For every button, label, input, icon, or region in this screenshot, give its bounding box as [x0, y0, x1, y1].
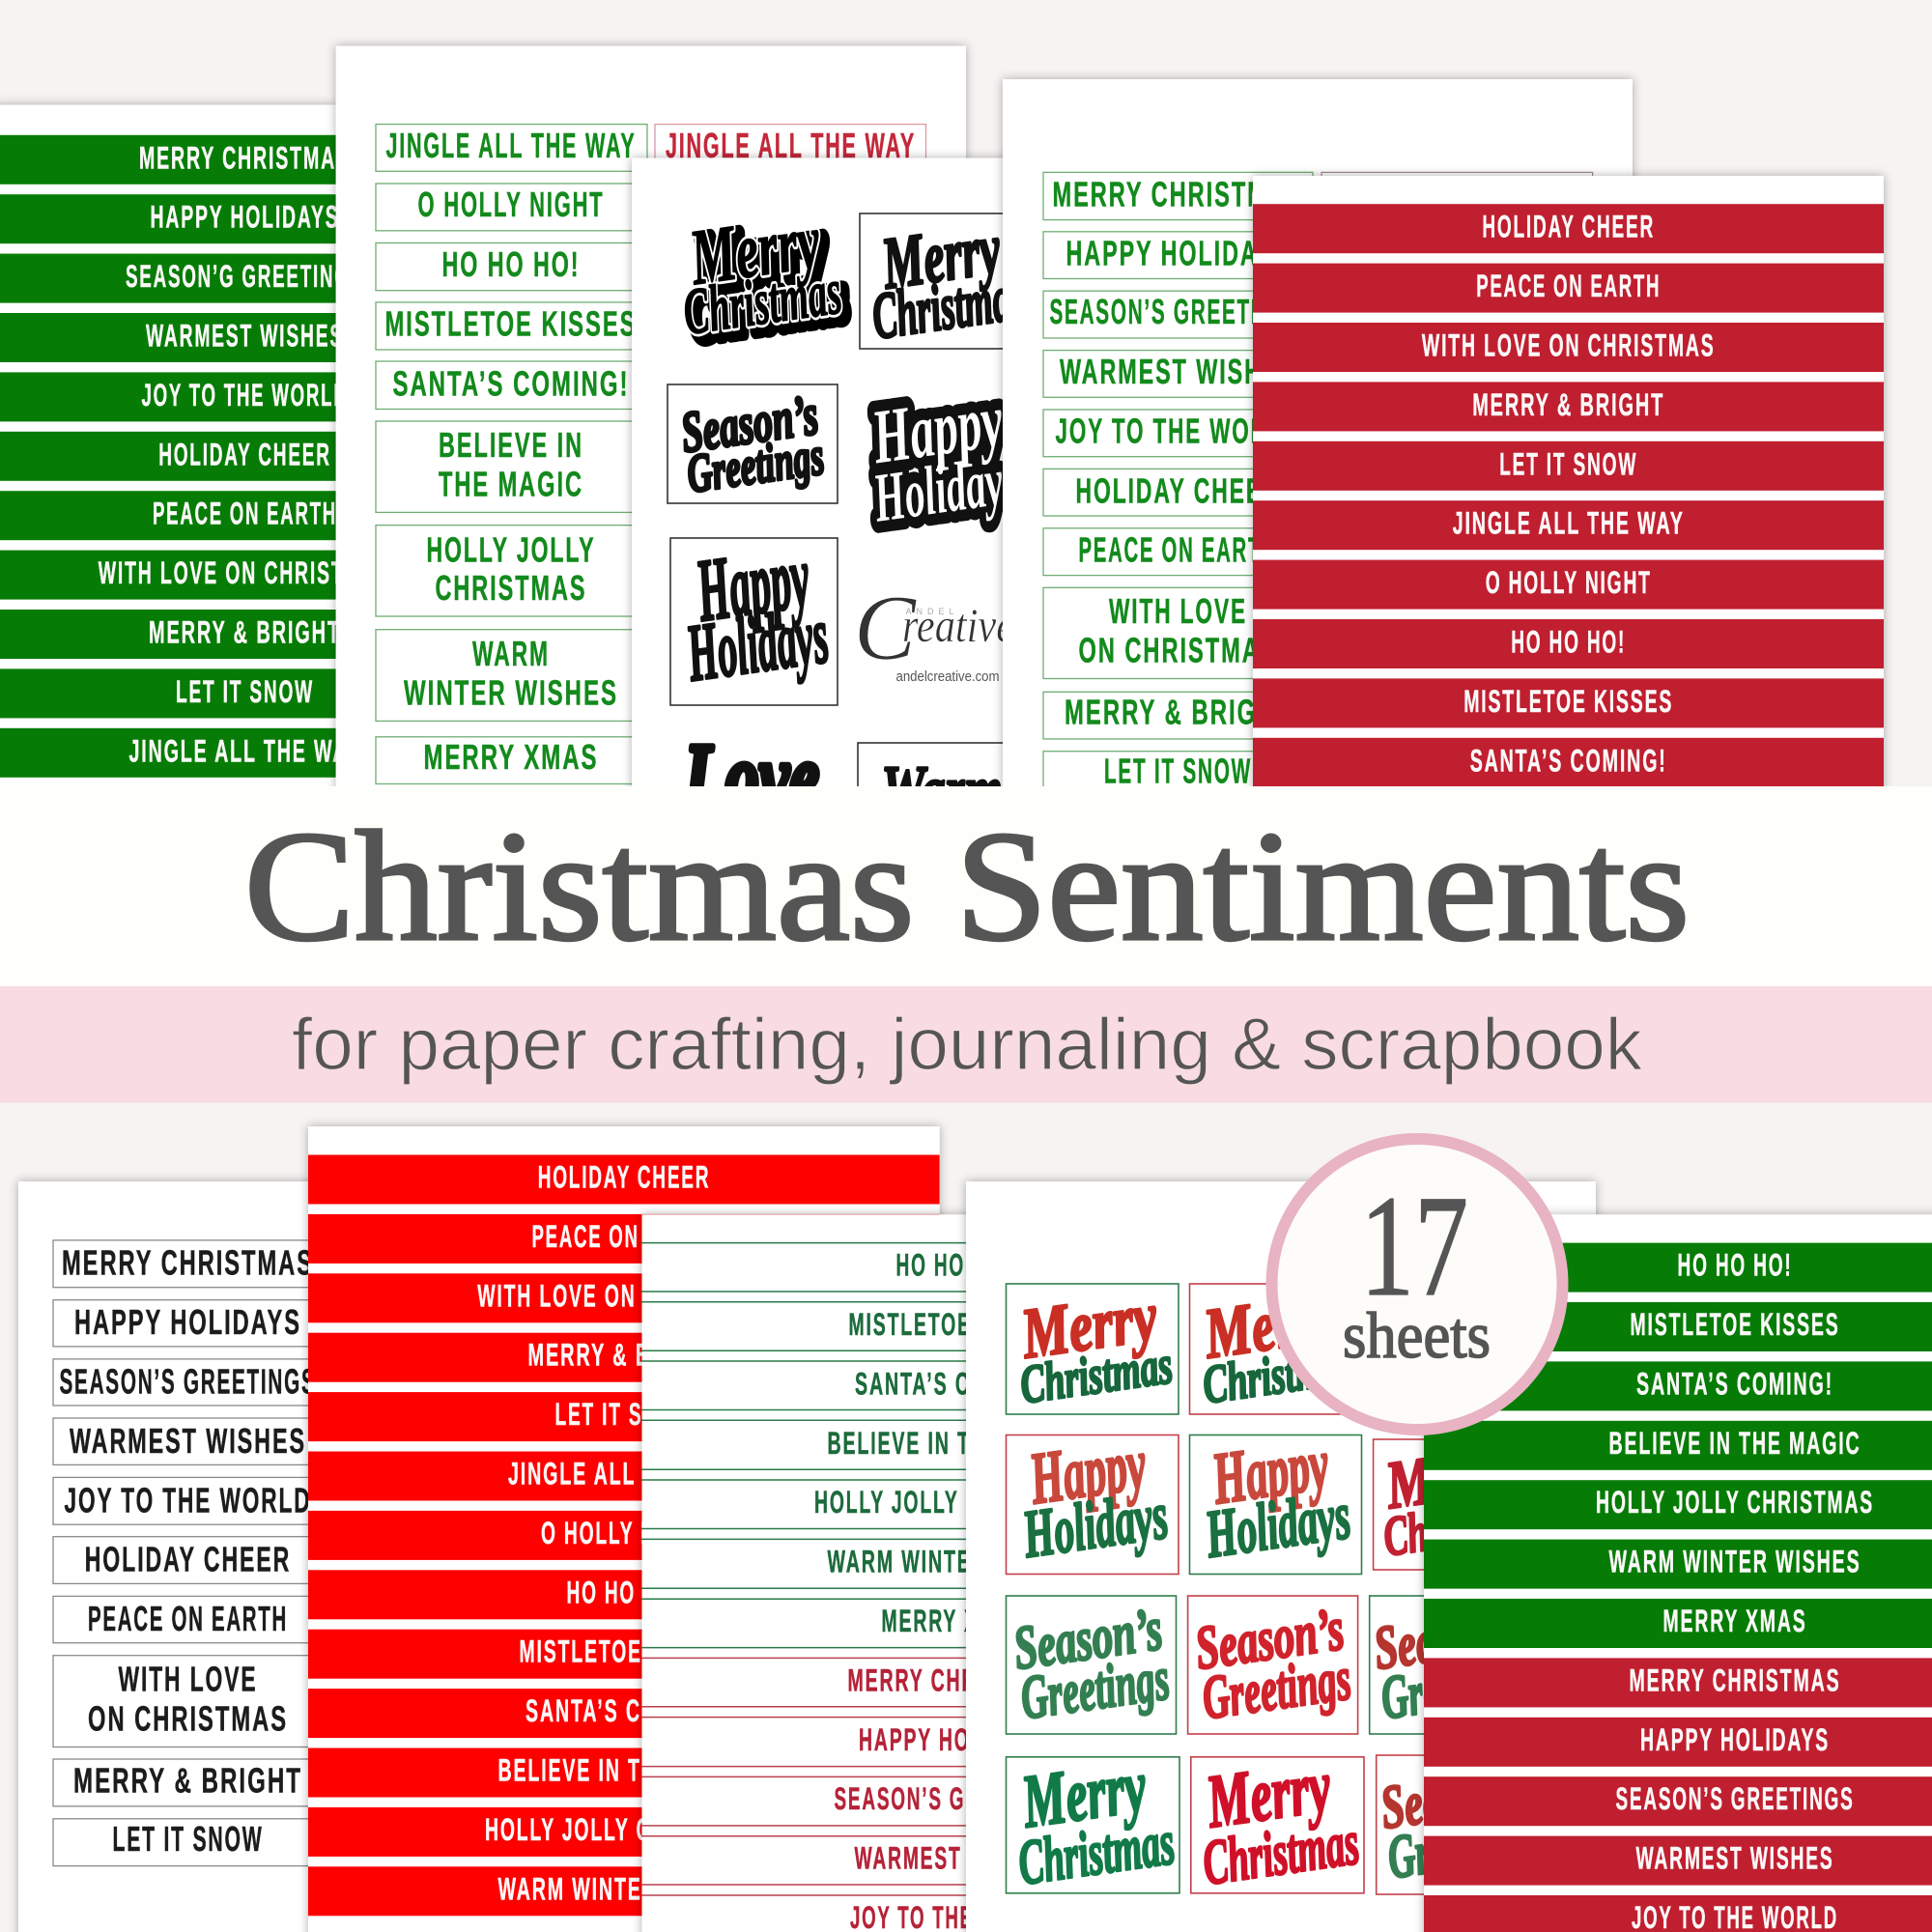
- strip: peace on earth: [0, 491, 337, 540]
- strip: joy to the world: [1424, 1895, 1932, 1932]
- sticker: happy holidays black blob: [860, 377, 1023, 537]
- strip: warmest wishes: [1424, 1836, 1932, 1886]
- label: happy holidays: HAPPY HOLIDAYS: [1066, 233, 1291, 272]
- label: jingle all the way red: [655, 125, 925, 171]
- label: holly jolly christmas: CHRISTMAS: [435, 568, 587, 608]
- strip: santas coming: [1253, 738, 1884, 787]
- strip: warm winter wishes: WARM WINTER WISHES: [498, 1871, 750, 1906]
- strip: believe in the magic: [308, 1748, 940, 1797]
- sticker: seasons greetings bottom: Greetings: [1383, 1803, 1541, 1891]
- sticker: happy holidays framed: [670, 526, 838, 705]
- strip: merry and bright: [0, 610, 341, 659]
- label: empty second column: [1321, 172, 1593, 220]
- strip: warm winter wishes: [1424, 1540, 1932, 1589]
- label: let it snow: [1043, 752, 1313, 798]
- sticker: happy holidays black blob: Holidays: [868, 440, 1023, 537]
- panel: black lettering stickers sheet: [632, 158, 1030, 831]
- text: mistletoe kisses: MISTLETOE KISSES: [848, 1307, 1059, 1342]
- strip: santas coming: [308, 1689, 940, 1738]
- sticker: merry christmas red green second: Christmas: [1199, 1335, 1358, 1415]
- sticker: seasons greetings green: [1007, 1594, 1177, 1734]
- sticker: happy holidays framed: Happy: [690, 526, 815, 639]
- strip: holiday cheer: [1253, 204, 1884, 253]
- label: jingle all the way red: JINGLE ALL THE WAY: [666, 126, 916, 165]
- sticker: happy holidays red green: [1007, 1421, 1179, 1575]
- label: merry christmas: MERRY CHRISTMAS: [1053, 174, 1304, 213]
- panel: thin ruled labels sheet: [641, 1214, 1093, 1932]
- strip: peace on earth: PEACE ON EARTH: [531, 1219, 717, 1254]
- label: ho ho ho: HO HO HO!: [442, 244, 580, 284]
- title banner: [0, 786, 1932, 986]
- strip: mistletoe kisses: MISTLETOE KISSES: [1463, 684, 1673, 719]
- label: let it snow: LET IT SNOW: [112, 1819, 263, 1859]
- strip: ho ho ho: [1253, 619, 1884, 668]
- strip: ho ho ho: HO HO HO!: [566, 1575, 682, 1609]
- label: merry and bright: [53, 1759, 328, 1806]
- sticker: happy holidays black blob: Happy: [867, 378, 1009, 480]
- label: joy to the world: [53, 1477, 328, 1524]
- label: merry and bright: MERRY & BRIGHT: [73, 1760, 302, 1801]
- logo: andel creative: C: [854, 576, 917, 679]
- strip: holiday cheer: HOLIDAY CHEER: [1482, 210, 1655, 244]
- logo: andel creative: reative: [902, 598, 1014, 652]
- text: warm winter wishes: WARM WINTER WISHES: [827, 1545, 1080, 1579]
- strip: mistletoe kisses: MISTLETOE KISSES: [520, 1634, 728, 1669]
- label: holiday cheer: HOLIDAY CHEER: [85, 1540, 291, 1579]
- strip: o holly night: [308, 1511, 940, 1560]
- logo: andel creative: andelcreative.com: [896, 669, 999, 685]
- sticker: merry christmas red green: [1007, 1276, 1179, 1415]
- sticker: merry christmas red: Merry: [1201, 1743, 1336, 1844]
- sticker: merry christmas red green second: Merry: [1199, 1277, 1346, 1375]
- label: merry and bright: MERRY & BRIGHT: [1065, 693, 1292, 732]
- sticker: merry christmas green: Merry: [1016, 1743, 1151, 1844]
- strip: seasons greetings: [0, 254, 364, 303]
- strip: santas coming: SANTA’S COMING!: [1470, 743, 1667, 778]
- strip: holly jolly christmas: [308, 1807, 940, 1857]
- label: merry xmas: [376, 737, 647, 784]
- strip: let it snow: LET IT SNOW: [1499, 446, 1637, 481]
- sticker: love: Love: [683, 724, 819, 831]
- strip: jingle all the way: [308, 1451, 940, 1501]
- sticker: merry christmas dark red: [1372, 1431, 1538, 1570]
- sticker: warm framed: Warm: [881, 752, 1003, 829]
- label: peace on earth: PEACE ON EARTH: [88, 1599, 288, 1638]
- strip: let it snow: [0, 668, 336, 718]
- strip: let it snow: LET IT SNOW: [176, 674, 314, 709]
- label: warmest wishes: WARMEST WISHES: [1060, 352, 1296, 391]
- label: believe in the magic: THE MAGIC: [439, 465, 583, 504]
- strip: merry xmas: [1424, 1599, 1932, 1648]
- strip: ho ho ho: HO HO HO!: [1677, 1248, 1793, 1283]
- label: jingle all the way green: JINGLE ALL THE WAY: [386, 126, 636, 165]
- label: jingle all the way green: [376, 125, 647, 171]
- strip: ho ho ho: [1424, 1243, 1932, 1293]
- label: seasons greetings: [53, 1359, 328, 1406]
- sticker: seasons greetings green: Greetings: [1016, 1643, 1174, 1732]
- strip: santas coming: SANTA’S COMING!: [526, 1693, 723, 1728]
- text: holly jolly christmas: HOLLY JOLLY CHRISTMAS: [814, 1485, 1093, 1520]
- label: with love on christmas: WITH LOVE: [1109, 591, 1247, 631]
- label: warm winter wishes: WINTER WISHES: [404, 673, 618, 713]
- sticker: happy holidays green frame: Happy: [1207, 1423, 1334, 1520]
- panel: green outlined labels sheet: [336, 46, 966, 792]
- sticker: happy holidays black blob: Holidays: [868, 440, 1023, 537]
- strip: holiday cheer: HOLIDAY CHEER: [538, 1159, 710, 1194]
- label: warmest wishes: WARMEST WISHES: [70, 1421, 306, 1461]
- logo: andel creative: ANDEL: [905, 607, 959, 616]
- strip: seasons greetings: SEASON’G GREETINGS: [126, 259, 364, 294]
- strip: santas coming: [1424, 1361, 1932, 1410]
- sticker: merry christmas outlined: Christmas: [679, 254, 846, 349]
- title: Christmas Sentiments: [244, 800, 1690, 974]
- strip: believe in the magic: [1424, 1421, 1932, 1470]
- sticker: merry christmas framed: Merry: [877, 208, 1006, 304]
- strip: with love on christmas: [1253, 323, 1884, 372]
- label: believe in the magic: BELIEVE IN: [439, 425, 583, 465]
- strip: with love on christmas: WITH LOVE ON CHRISTMAS: [1422, 328, 1715, 363]
- strip: holiday cheer: [0, 432, 336, 481]
- sticker: merry christmas framed: Christmas: [867, 259, 1029, 353]
- strip: let it snow: [1253, 441, 1884, 491]
- strip: merry and bright: MERRY & BRIGHT: [527, 1338, 721, 1373]
- label: holly jolly christmas: HOLLY JOLLY: [427, 529, 595, 569]
- text: believe in the magic: BELIEVE IN THE MAGIC: [827, 1426, 1080, 1461]
- label: joy to the world: JOY TO THE WORLD: [64, 1480, 311, 1520]
- text: santas coming: SANTA’S COMING!: [855, 1366, 1052, 1401]
- sticker: warm framed: [858, 743, 1028, 829]
- sticker: merry christmas outlined: Merry: [690, 202, 832, 307]
- sticker: merry christmas outlined: [670, 194, 852, 355]
- sticker: merry christmas outlined: Christmas: [685, 260, 852, 355]
- strip: holly jolly christmas: [1424, 1480, 1932, 1529]
- strip: with love on christmas: WITH LOVE ON CHRISTMAS: [477, 1278, 771, 1313]
- strip: holiday cheer: HOLIDAY CHEER: [158, 437, 331, 471]
- sticker: happy holidays black blob: Happy: [867, 378, 1009, 480]
- text: seasons greetings: SEASON’S GREETINGS: [835, 1781, 1072, 1816]
- strip: holly jolly christmas: HOLLY JOLLY CHRISTMAS: [485, 1812, 763, 1847]
- label: warm winter wishes: [376, 630, 647, 721]
- label: ho ho ho: [376, 243, 647, 291]
- label: happy holidays: [1043, 232, 1313, 278]
- sticker: merry christmas green: Christmas: [1014, 1807, 1179, 1899]
- label: with love on christmas: [53, 1656, 328, 1747]
- sticker: merry christmas outlined: Christmas: [679, 254, 846, 349]
- strip: peace on earth: [1253, 264, 1884, 313]
- strip: with love on christmas: WITH LOVE ON CHRISTMAS: [99, 555, 391, 590]
- subtitle: for paper crafting, journaling & scrapbook: [292, 1004, 1643, 1086]
- label: merry christmas: MERRY CHRISTMAS: [62, 1243, 314, 1283]
- sticker: merry christmas red green: Merry: [1016, 1277, 1163, 1375]
- logo: andel creative: [854, 576, 1014, 685]
- strip: seasons greetings: [1424, 1776, 1932, 1826]
- sticker: seasons greetings framed: Greetings: [683, 426, 828, 504]
- label: warmest wishes: [1043, 351, 1313, 397]
- label: merry xmas: MERRY XMAS: [423, 737, 599, 777]
- label: mistletoe kisses: [376, 302, 647, 350]
- panel: green and red strips sheet: [1424, 1214, 1932, 1932]
- sticker: seasons greetings red: [1188, 1594, 1358, 1734]
- label: joy to the world: [1043, 410, 1313, 457]
- strip: merry christmas: MERRY CHRISTMAS: [139, 140, 351, 175]
- sticker: happy holidays green frame: [1190, 1421, 1362, 1575]
- label: warm winter wishes: WARM: [472, 634, 550, 673]
- rules: red row lines: [641, 1658, 976, 1895]
- label: happy holidays: [53, 1300, 328, 1347]
- label: with love on christmas: WITH LOVE: [118, 1660, 257, 1699]
- sticker: merry christmas dark red: Merry: [1380, 1432, 1521, 1523]
- label: peace on earth: [1043, 528, 1313, 576]
- panel: deep red strips sheet: [1253, 176, 1884, 792]
- sticker: seasons greetings red green: Season’s: [1370, 1594, 1526, 1683]
- strip: jingle all the way: [0, 728, 361, 778]
- strip: merry xmas: MERRY XMAS: [1663, 1604, 1806, 1638]
- label: o holly night: [376, 184, 647, 231]
- strip: happy holidays: HAPPY HOLIDAYS: [151, 200, 340, 235]
- sticker: merry christmas outlined: Merry: [684, 196, 826, 301]
- label: with love on christmas: ON CHRISTMAS: [1078, 631, 1277, 670]
- sticker: happy holidays red green: Holidays: [1018, 1479, 1173, 1573]
- panel: black outlined labels sheet: [18, 1181, 405, 1932]
- text: warmest wishes: WARMEST WISHES: [854, 1841, 1053, 1876]
- panel: bright red strips sheet: [308, 1126, 940, 1932]
- strip: merry christmas: [0, 135, 351, 185]
- label: holly jolly christmas: [376, 526, 647, 616]
- panel: coloured lettering stickers sheet: [966, 1181, 1596, 1932]
- label: let it snow: [53, 1819, 328, 1866]
- label: o holly night: O HOLLY NIGHT: [417, 185, 605, 224]
- sticker: seasons greetings framed: Season’s: [677, 383, 822, 465]
- label: merry christmas: [1043, 172, 1313, 220]
- badge: 17 sheets: [1271, 1139, 1563, 1430]
- strip: peace on earth: [308, 1214, 940, 1264]
- strip: let it snow: LET IT SNOW: [554, 1397, 694, 1432]
- strip: mistletoe kisses: [308, 1630, 940, 1679]
- sticker: happy holidays framed: Holidays: [681, 590, 834, 699]
- sticker: merry christmas red green second: [1190, 1276, 1362, 1415]
- strip: merry and bright: [308, 1333, 940, 1382]
- label: peace on earth: [53, 1596, 328, 1643]
- panel: solid green strips sheet: [0, 104, 391, 792]
- strip: jingle all the way: JINGLE ALL THE WAY: [129, 733, 361, 768]
- strip: ho ho ho: HO HO HO!: [1511, 624, 1626, 659]
- sticker: seasons greetings framed: [668, 383, 838, 504]
- strip: warmest wishes: WARMEST WISHES: [146, 319, 344, 354]
- strip: peace on earth: PEACE ON EARTH: [1476, 269, 1661, 303]
- badge number: 17: [1360, 1166, 1468, 1326]
- text: ho ho ho: HO HO HO!: [896, 1248, 1010, 1283]
- strip: jingle all the way: JINGLE ALL THE WAY: [1453, 506, 1685, 541]
- sticker: merry christmas red: Christmas: [1199, 1807, 1363, 1899]
- label: joy to the world: JOY TO THE WORLD: [1055, 412, 1300, 450]
- text: merry christmas: MERRY CHRISTMAS: [848, 1662, 1059, 1697]
- label: merry and bright: [1043, 692, 1313, 739]
- strip: warm winter wishes: [308, 1866, 940, 1916]
- sticker: merry christmas red: [1189, 1740, 1364, 1899]
- label: mistletoe kisses: MISTLETOE KISSES: [384, 303, 638, 343]
- rules: green row lines: [641, 1243, 976, 1648]
- sticker: happy holidays green frame: Holidays: [1201, 1479, 1355, 1573]
- strip: warmest wishes: [0, 313, 344, 362]
- strip: with love on christmas: [0, 551, 391, 600]
- label: seasons greetings: SEASON’S GREETINGS: [1049, 292, 1306, 331]
- sticker: seasons greetings green: Season’s: [1009, 1594, 1166, 1683]
- label: believe in the magic: [376, 421, 647, 512]
- strip: o holly night: O HOLLY NIGHT: [1486, 565, 1652, 600]
- label: seasons greetings: SEASON’S GREETINGS: [60, 1362, 317, 1401]
- strip: mistletoe kisses: [1253, 678, 1884, 727]
- strip: happy holidays: [1424, 1718, 1932, 1767]
- sticker: seasons greetings red: Greetings: [1198, 1643, 1355, 1732]
- sticker: merry christmas outlined: Merry: [684, 196, 826, 301]
- strip: mistletoe kisses: [1424, 1302, 1932, 1351]
- label: holiday cheer: [1043, 469, 1313, 516]
- label: holiday cheer: HOLIDAY CHEER: [1076, 470, 1281, 510]
- label: merry christmas: [53, 1240, 328, 1288]
- strip: merry and bright: MERRY & BRIGHT: [149, 614, 341, 649]
- sticker: seasons greetings red green: Greetings: [1377, 1643, 1534, 1732]
- strip: merry and bright: [1253, 382, 1884, 431]
- label: seasons greetings: [1043, 291, 1313, 338]
- strip: jingle all the way: [1253, 500, 1884, 550]
- strip: believe in the magic: BELIEVE IN THE MAGIC: [498, 1752, 750, 1787]
- strip: joy to the world: [0, 372, 348, 421]
- strip: peace on earth: PEACE ON EARTH: [153, 497, 337, 531]
- label: holiday cheer: [53, 1537, 328, 1583]
- label: with love on christmas: [1043, 587, 1313, 678]
- strip: joy to the world: JOY TO THE WORLD: [141, 378, 348, 412]
- strip: holiday cheer: [308, 1155, 940, 1204]
- sticker: seasons greetings red green: [1370, 1594, 1534, 1734]
- sticker: seasons greetings bottom: Season’s: [1377, 1753, 1533, 1842]
- sticker: seasons greetings bottom: [1377, 1753, 1541, 1894]
- label: santas coming: SANTA’S COMING!: [392, 363, 630, 403]
- panel: green outlined labels sheet right: [1003, 79, 1633, 798]
- label: warmest wishes: [53, 1418, 328, 1464]
- strip: happy holidays: [0, 194, 340, 243]
- strip: ho ho ho: [308, 1570, 940, 1619]
- strip: jingle all the way: JINGLE ALL THE WAY: [508, 1457, 740, 1492]
- sticker: merry christmas framed: [860, 206, 1030, 353]
- sticker: merry christmas green: [1005, 1740, 1179, 1899]
- strip: merry and bright: MERRY & BRIGHT: [1472, 387, 1664, 422]
- strip: let it snow: [308, 1392, 940, 1441]
- strip: o holly night: O HOLLY NIGHT: [541, 1516, 707, 1550]
- label: let it snow: LET IT SNOW: [1104, 752, 1252, 790]
- label: with love on christmas: ON CHRISTMAS: [88, 1698, 288, 1738]
- sticker: seasons greetings red: Season’s: [1191, 1594, 1348, 1683]
- label: peace on earth: PEACE ON EARTH: [1078, 529, 1277, 569]
- badge word: sheets: [1343, 1298, 1491, 1372]
- strip: o holly night: [1253, 560, 1884, 610]
- sticker: merry christmas dark red: Christmas: [1379, 1485, 1537, 1568]
- text: happy holidays: HAPPY HOLIDAYS: [859, 1722, 1048, 1757]
- sticker: merry christmas red green: Christmas: [1016, 1335, 1176, 1415]
- label: santas coming: [376, 361, 647, 410]
- strip: with love on christmas: [308, 1273, 940, 1322]
- label: happy holidays: HAPPY HOLIDAYS: [74, 1302, 301, 1342]
- subtitle banner: [0, 986, 1932, 1103]
- sticker: happy holidays red green: Happy: [1024, 1423, 1151, 1520]
- strip: merry christmas: [1424, 1658, 1932, 1707]
- text: merry xmas: MERRY XMAS: [881, 1604, 1026, 1638]
